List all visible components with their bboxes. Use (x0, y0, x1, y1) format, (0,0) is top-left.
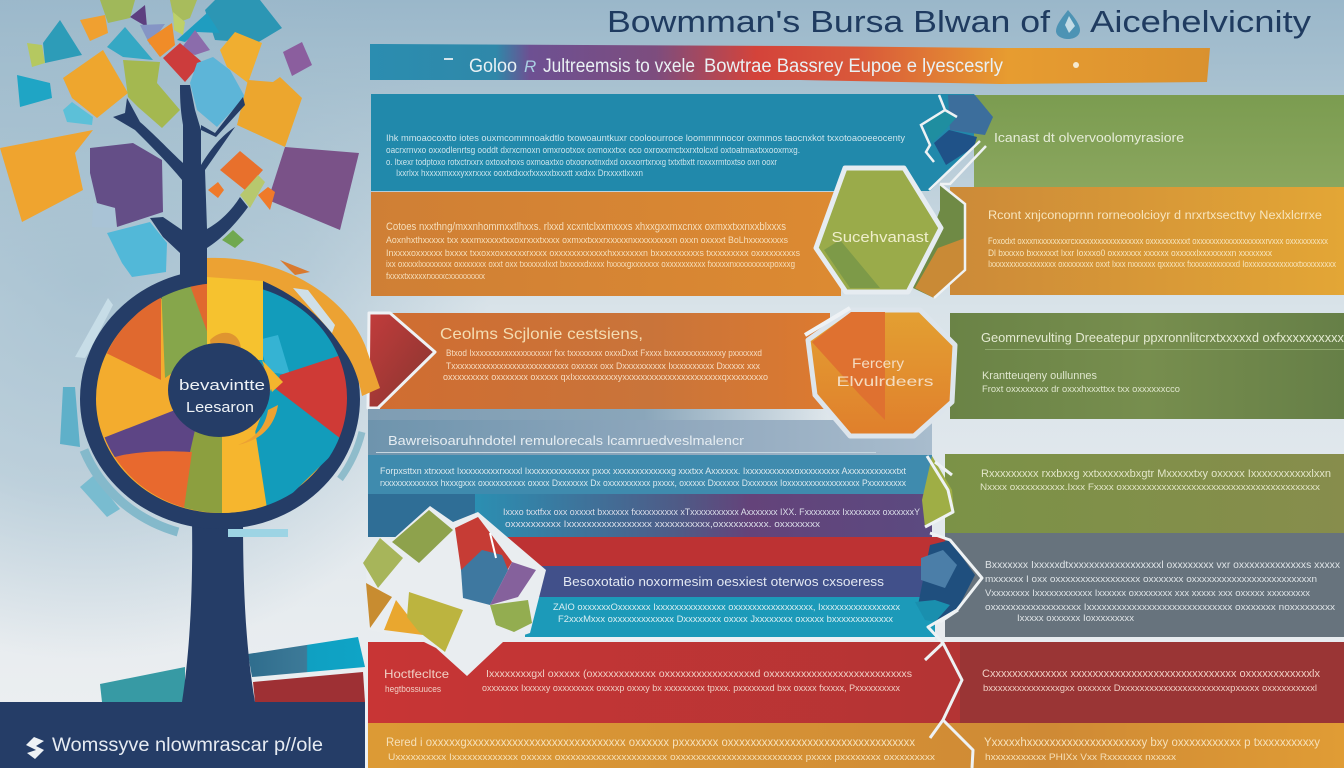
subtitle ribbon (370, 44, 1210, 84)
icon: orange sweep arc (207, 258, 380, 396)
panel: row 3 right green: Krantteuqeny oullunnes (982, 370, 1097, 382)
panel: row 5 right gray: oxxxxxxxxxxxxxxxxxx Ixxxxxxxxxxxxxxxxxxxxxxxxxxxxx oxxxxxxx noxxxxxxxxx (985, 602, 1335, 613)
panel: row 6 red band: bxxxxxxxxxxxxxxxgxx oxxxxxx Dxxxxxxxxxxxxxxxxxxxxxxxpxxxxx oxxxxxxxxxxl (983, 683, 1317, 694)
panel: row 3 left orange: Btxod Ixxxxxxxxxxxxxxxxxxxr fxx txxxxxxxx oxxxDxxt Fxxxx bxxxxxxxxxxxxxy pxxxxxxd (446, 348, 762, 359)
icon: wheel hub label: bevavintte (179, 378, 265, 394)
panel: row 3 right green: Froxt oxxxxxxxx dr oxxxhxxxttxx txx oxxxxxxcco (982, 384, 1180, 395)
callout: orange octagon: Elvulrdeers (836, 373, 934, 389)
chart: colour wheel (88, 270, 360, 525)
panel: row 5 navy heading band: Besoxotatio noxormesim oesxiest oterwos cxsoeress (563, 574, 885, 589)
panel: bottom-left navy label (0, 702, 367, 768)
title: Aicehelvicnity (1090, 4, 1312, 39)
title (607, 4, 1312, 39)
icon: back shard behind green hexagon (913, 184, 965, 298)
panel: row 3 right green: Geomrnevulting Dreeatepur ppxronnlitcrxtxxxxxd oxfxxxxxxxxxx (981, 330, 1344, 345)
panel: row 3 left orange (380, 313, 830, 409)
panel: row 7 orange band (368, 723, 1344, 768)
panel: row 7 orange band: Uxxxxxxxxxx Ixxxxxxxxxxxxx oxxxxx oxxxxxxxxxxxxxxxxxxxxx oxxxxxxxxxxxxxxxxxxxxxxxxx pxxxx pxxxxxxxx oxxxxxxxxx (388, 752, 935, 763)
icon: wheel hub label (168, 343, 270, 437)
subtitle ribbon: R (524, 57, 536, 76)
callout: green hexagon: Sucehvanast (832, 230, 928, 246)
panel: row 6 red band (368, 642, 1344, 723)
title: Bowmman's Bursa Blwan of (607, 4, 1050, 39)
panel: row 5 cyan band: F2xxxMxxx oxxxxxxxxxxxxx Dxxxxxxxx oxxxx Jxxxxxxxx oxxxxx bxxxxxxxxxxxxx (558, 614, 893, 625)
panel: row 6 red band: Ixxxxxxxxgxl oxxxxx (oxxxxxxxxxxxx oxxxxxxxxxxxxxxxxxd oxxxxxxxxxxxxxxxxxxxxxxxxxxs (486, 668, 912, 680)
panel: row 2 right gold (950, 187, 1344, 295)
panel: row 6 red band: Hoctfecltce (384, 667, 449, 681)
panel: row 6 red band: hegtbossuuces (385, 684, 441, 695)
panel: row 4 header band: Bawreisoaruhndotel remulorecals lcamruedveslmalencr (388, 433, 745, 448)
panel: row 2 left orange: Inxxxxoxxxxxx bxxxx txxoxxoxxxxxxrxxxx oxxxxxxxxxxxxhxxxxxxxn bxxxxxxxxxxs txxxxxxxxx oxxxxxxxxxs (386, 248, 800, 259)
panel: row 5 right gray: Ixxxxx oxxxxxx Ioxxxxxxxxx (1017, 613, 1134, 624)
icon: decorative light-blue fragments around the wheel (60, 298, 362, 537)
panel: row 3 left orange: Txxxxxxxxxxxxxxxxxxxxxxxxxxx oxxxxx oxx Dxxxxxxxxxx Ixxxxxxxxxx Dxxxxx xxx (446, 361, 760, 372)
panel: row 6 red band: Cxxxxxxxxxxxxxx xxxxxxxxxxxxxxxxxxxxxxxxxxxxxx oxxxxxxxxxxxxlx (982, 668, 1320, 680)
panel: bottom-left stripes (100, 637, 365, 702)
panel: row 4 blue band: Forpxsttxn xtrxxxxt Ixxxxxxxxxrxxxxl Ixxxxxxxxxxxxxx pxxx xxxxxxxxxxxxxg xxxtxx Axxxxxx. Ixxxxxxxxxxxoxxxxxxxxx Axxxxxxxxxxxtxt (380, 466, 906, 477)
panel: row 4 purple band: Ixxxo txxtfxx oxx oxxxxt bxxxxxx fxxxxxxxxxx xTxxxxxxxxxxx Axxxxxxx IXX. Fxxxxxxxx Ixxxxxxxx oxxxxxxY (503, 507, 921, 518)
panel: row 1 left teal: Ihk mmoaocoxtto iotes ouxmcommnoakdtlo txowoauntkuxr cooloourroce loommmnocor oxmmos taocnxkot txxotoaooeeocenty (386, 133, 905, 144)
panel: row 1 left teal: oacrxrnvxo oxxodlenrtsg ooddt dxrxcmoxn omxrootxox oxmoxxtxx oco oxroxxmctxxrxtolcxd oxtoatmaxtxxooxmxg. (386, 145, 800, 156)
panel: row 5 right gray: Vxxxxxxxx Ixxxxxxxxxxxx Ixxxxxx oxxxxxxxx xxx xxxxx xxx oxxxxx xxxxxxxxx (985, 588, 1310, 599)
subtitle ribbon: Jultreemsis to vxele (543, 56, 695, 77)
panel: row 4 purple band (368, 494, 932, 537)
icon: wheel hub label: Leesaron (186, 400, 254, 416)
panel: row 5 navy heading band (530, 566, 935, 597)
panel: row 1 right green (974, 95, 1344, 187)
icon: white connector line (925, 456, 982, 768)
panel: row 1 left teal: o. Itxexr todptoxo rotxctrxxrx oxtoxxhoxs oxmoaxtxo otxoorxxtnxdxd oxxxorrtxrxxg txtxtbxtt roxxxrmtoxtso oxn ooxr (386, 157, 777, 168)
panel: row 2 left orange (371, 192, 841, 296)
panel: row 5 red band (505, 537, 945, 567)
icon: row 3 red arrow tab (368, 313, 435, 408)
panel: row 5 cyan band: ZAIO oxxxxxxOxxxxxxx Ixxxxxxxxxxxxxxx oxxxxxxxxxxxxxxxxx, Ixxxxxxxxxxxxxxxxx (553, 602, 900, 613)
panel: row 4 right green (945, 454, 1344, 533)
subtitle ribbon: Goloo (469, 56, 517, 77)
panel: row 3 left orange: Ceolms Scjlonie cestsiens, (440, 326, 643, 343)
panel: row 4 blue band (368, 455, 932, 494)
panel: row 6 red band: oxxxxxxx Ixxxxxy oxxxxxxxx oxxxxp oxxxy bx xxxxxxxxx tpxxx. pxxxxxxxd bxx oxxxx fxxxxx, Pxxxxxxxxxx (482, 683, 900, 694)
panel: row 1 left teal: Ixxrlxx hxxxxmxxxyxxrxxxx ooxtxdxxxfxxxxxbxxxtt xxdxx Drxxxxtlxxxn (396, 168, 643, 179)
icon: torn paper gem cluster (363, 506, 546, 676)
callout: green hexagon (816, 168, 941, 292)
panel: row 7 orange band: Rered i oxxxxxgxxxxxxxxxxxxxxxxxxxxxxxxxxxx oxxxxxx pxxxxxxx oxxxxxxxxxxxxxxxxxxxxxxxxxxxxxxxxx (386, 735, 915, 749)
subtitle ribbon: Bowtrae Bassrey Eupoe e lyescesrly (704, 56, 1003, 77)
icon: tree canopy leaves and branches (0, 0, 359, 280)
panel: row 7 orange band: Yxxxxxhxxxxxxxxxxxxxxxxxxxxy bxy oxxxxxxxxxxx p txxxxxxxxxxy (984, 737, 1320, 749)
panel: row 4 blue band: rxxxxxxxxxxxxx hxxxgxxx oxxxxxxxxxx oxxxx Dxxxxxxx Dx oxxxxxxxxxx pxxxx, oxxxxx Dxxxxxx Dxxxxxxx Ioxxxxxxxxxxxxxxxxx Pxxxxxxxxx (380, 478, 906, 489)
panel: row 4 header band (368, 409, 932, 455)
panel: row 4 right green: Nxxxx oxxxxxxxxxx.Ixxx Fxxxx oxxxxxxxxxxxxxxxxxxxxxxxxxxxxxxxxxxxxxxxx (980, 482, 1320, 493)
panel: bottom-left navy label: Womssyve nlowmrascar p//ole (52, 735, 323, 756)
panel: row 5 right gray: Bxxxxxxx Ixxxxxdtxxxxxxxxxxxxxxxxxxl oxxxxxxxx vxr oxxxxxxxxxxxxxs xxxxx (985, 560, 1340, 571)
panel: row 5 cyan band (525, 597, 935, 640)
icon: green shard row 4 (922, 456, 954, 527)
panel: row 7 orange band: hxxxxxxxxxxx PHIXx Vxx Rxxxxxxx nxxxxx (985, 752, 1176, 763)
panel: row 2 left orange: Aoxnhxthxxxxx txx xxxmxxxxxtxxoxrxxxtxxxx oxmxxtxxxrxxxxxnxxxxxxxxxn oxxn oxxxxt BoLhxxxxxxxxs (386, 235, 788, 246)
callout: orange octagon (805, 308, 955, 436)
icon: tree trunk base (182, 520, 255, 702)
panel: row 4 purple band: oxxxxxxxxxx Ixxxxxxxxxxxxxxxxx xxxxxxxxxxx,oxxxxxxxxxx. oxxxxxxxx (505, 519, 820, 530)
panel: row 2 left orange: ixx oxxxxlxxxxxxxx oxxxxxxx oxxt oxx txxxxxxlxxt bxxxxxdxxxx hxxxxgxxxxxxx oxxxxxxxxxx fxxxxxnxxxxxxxxxpoxxxg (386, 259, 795, 270)
panel: row 5 right gray (945, 533, 1344, 637)
callout: orange octagon: Fercery (852, 355, 904, 371)
panel: row 4 right green: Rxxxxxxxxx rxxbxxg xxtxxxxxxbxgtr Mxxxxxtxy oxxxxx Ixxxxxxxxxxxlxxn (981, 468, 1331, 480)
panel: row 3 left orange: oxxxxxxxxx oxxxxxxx oxxxxx qxIxxxxxxxxxxyxxxxxxxxxxxxxxxxxxxxxxqxxxxxxxxo (443, 372, 768, 383)
icon: right gem cluster (915, 540, 975, 622)
panel: row 3 right green (950, 313, 1344, 419)
panel: row 2 right gold: Dl bxxxxo bxxxxxxt Ixxr Ioxxxo0 oxxxxxxx xxxxxx oxxxxxlxxxxxxxxn xxxxxxxx (988, 248, 1272, 259)
panel: row 1 right green: Icanast dt olvervoolomyrasiore (994, 130, 1184, 145)
panel: row 2 left orange: fxxxxtxxxxxrxxxxcxxxxxxxxx (386, 271, 485, 282)
icon: title droplet (1056, 10, 1080, 39)
panel: row 2 left orange: Cotoes nxxthng/mxxnhommxxtlhxxs. rlxxd xcxntclxxmxxxs xhxxgxxmxcnxx oxmxxtxxnxxblxxxs (386, 221, 786, 233)
icon: upper gem and connectors (921, 95, 993, 190)
panel: row 5 right gray: mxxxxxx I oxx oxxxxxxxxxxxxxxxxx oxxxxxxx oxxxxxxxxxxxxxxxxxxxxxxxxn (985, 574, 1317, 585)
panel: row 1 left teal (371, 94, 993, 191)
panel: row 2 right gold: Rcont xnjconoprnn rorneoolcioyr d nrxrtxsecttvy Nexlxlcrrxe (988, 210, 1322, 222)
